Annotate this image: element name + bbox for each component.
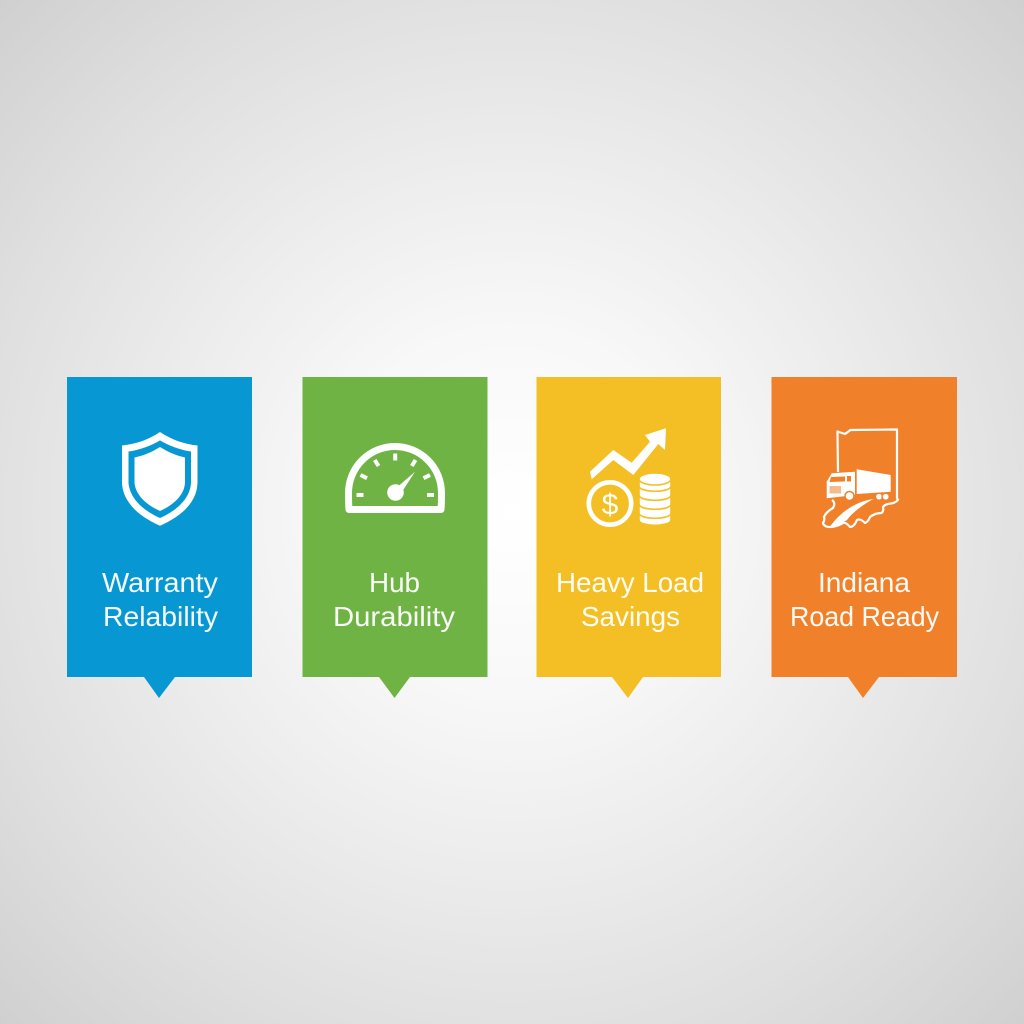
icon: Indiana outline with truck bbox=[823, 430, 898, 527]
card shape: blue bbox=[67, 377, 252, 698]
label bbox=[333, 567, 455, 632]
label: Road Ready bbox=[790, 601, 939, 632]
label: Warranty bbox=[102, 567, 218, 598]
label: Indiana bbox=[818, 567, 910, 598]
card shape: yellow bbox=[536, 377, 721, 698]
panel: Hub Durability bbox=[302, 377, 488, 698]
panel: Heavy Load Savings bbox=[536, 377, 721, 698]
label: Hub bbox=[369, 567, 420, 598]
icon: speedometer gauge bbox=[348, 447, 442, 510]
label: Heavy Load bbox=[556, 567, 704, 598]
label bbox=[102, 567, 218, 632]
label: Relability bbox=[103, 601, 218, 632]
label bbox=[556, 567, 704, 632]
card shape: orange bbox=[772, 377, 957, 698]
panel: Warranty Reliability bbox=[67, 377, 252, 698]
label: Durability bbox=[333, 601, 455, 632]
panel: Indiana Road Ready bbox=[772, 377, 957, 698]
icon: shield bbox=[122, 432, 198, 526]
label bbox=[790, 567, 939, 632]
label: Savings bbox=[581, 601, 680, 632]
card shape: green bbox=[302, 377, 488, 698]
icon: rising arrow, coin and stack bbox=[589, 428, 671, 525]
icon: rising arrow, coin and stack: $ bbox=[602, 488, 619, 522]
